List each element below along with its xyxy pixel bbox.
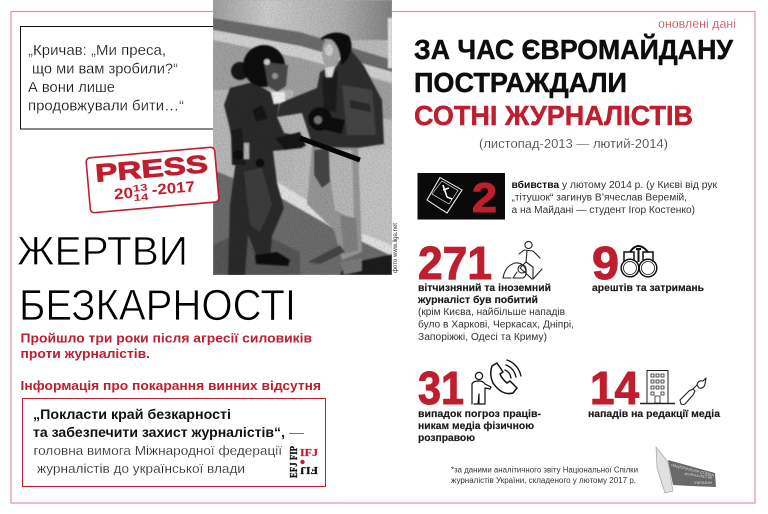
panel: quote box: „Кричав: „Ми преса,	[28, 43, 166, 59]
title	[414, 33, 734, 131]
stat: 31 threats: 31	[418, 362, 464, 414]
text block: three years passed	[20, 332, 321, 393]
main heading: victims of impunity: БЕЗКАРНОСТІ	[19, 281, 296, 330]
stat: 31 threats: никам медіа фізичною	[418, 420, 534, 432]
stat: 14 attacks	[588, 362, 720, 420]
stat: 271 beaten: 271	[418, 237, 492, 289]
stat: 2 killed: а на Майдані — студент Ігор Костенко)	[512, 205, 695, 216]
label: updated data: оновлені дані	[658, 17, 736, 31]
soldier	[224, 82, 303, 275]
panel: IFJ demand: —	[289, 425, 305, 440]
text block: three years passed: Пройшло три роки після агресії силовиків	[20, 332, 312, 346]
main heading: victims of impunity: ЖЕРТВИ	[17, 228, 188, 274]
title: ЗА ЧАС ЄВРОМАЙДАНУ	[414, 33, 734, 65]
stat: 271 beaten: було в Харкові, Черкасах, Дніпрі,	[418, 318, 574, 330]
stat: 271 beaten: Запоріжжі, Одесі та Криму)	[418, 332, 547, 343]
text block: three years passed: Інформація про покарання винних відсутня	[20, 379, 321, 393]
panel: quote box: що ми вам зробили?“	[32, 62, 178, 78]
icon: NUJU pen flag logo	[656, 447, 716, 493]
logo: IFJ	[288, 446, 318, 478]
panel: IFJ demand: головна вимога Міжнародної федерації	[34, 443, 282, 458]
footnote: *за даними аналітичного звіту Національної Спілки	[451, 466, 638, 474]
stat: 2 killed	[418, 173, 718, 221]
panel: IFJ demand: „Покласти край безкарності	[33, 407, 231, 422]
stat: 31 threats	[418, 360, 542, 444]
stat: 9 arrests: арештів та затримань	[592, 282, 705, 294]
stat: 2 killed: 2	[472, 174, 497, 221]
icon: NUJU pen flag logo: ЖУРНАЛІСТІВ	[684, 472, 713, 480]
panel: IFJ demand: та забезпечити захист журналістів“,	[33, 425, 285, 440]
stamp: press 2013-14 to 2017: 13	[132, 182, 148, 195]
icon: NUJU pen flag logo: НАЦІОНАЛЬНА СПІЛКА	[671, 463, 715, 478]
stamp: press 2013-14 to 2017: 14	[133, 192, 150, 204]
photo: riot officer and beaten journalist	[213, 0, 392, 275]
logo: IFJ: IFJ	[300, 448, 318, 459]
icon: photo frame with figure	[427, 178, 462, 213]
logo: IFJ: EFJ FIP	[288, 446, 300, 478]
panel: quote box: А вони лише	[28, 80, 115, 96]
title: СОТНІ ЖУРНАЛІСТІВ	[414, 100, 693, 131]
photo credit: фото www.liga.net	[393, 223, 399, 273]
icon: handcuffs	[621, 246, 657, 277]
icon: building	[640, 370, 675, 404]
stat: 9 arrests	[592, 237, 705, 294]
title: ПОСТРАЖДАЛИ	[414, 67, 627, 98]
panel: IFJ demand: журналістів до української влади	[37, 461, 245, 476]
stat: 271 beaten: (крім Києва, найбільше нападів	[418, 306, 565, 318]
logo: IFJ: FIJ	[300, 464, 318, 475]
footnote: журналістів України, складеного у лютому 2017 р.	[451, 476, 636, 485]
stamp: press 2013-14 to 2017	[86, 147, 219, 213]
journalist pants	[307, 147, 362, 260]
stat: 31 threats: розправою	[418, 432, 475, 444]
text block: three years passed: проти журналістів.	[20, 347, 150, 361]
stamp: press 2013-14 to 2017: -2017	[151, 178, 195, 199]
main heading: victims of impunity	[17, 228, 296, 330]
stat: 14 attacks: нападів на редакції медіа	[588, 408, 720, 420]
panel: IFJ demand	[22, 398, 326, 486]
subtitle: period: (листопад-2013 — лютий-2014)	[479, 136, 668, 151]
panel: quote box: продовжували бити…“	[28, 98, 184, 114]
stat: 2 killed: вбивства у лютому 2014 р. (у Києві від рук	[512, 179, 718, 191]
icon: person with phone	[472, 360, 521, 404]
stat: 14 attacks: 14	[590, 362, 639, 414]
footnote	[451, 466, 638, 485]
stamp: press 2013-14 to 2017: 20	[113, 185, 134, 203]
journalist jacket	[277, 50, 384, 148]
stat: 31 threats: випадок погроз праців-	[418, 408, 542, 420]
stat: 271 beaten	[417, 237, 574, 343]
stat: 271 beaten: журналіст був побитий	[417, 294, 538, 306]
stat: 9 arrests: 9	[592, 237, 619, 289]
stat: 271 beaten: вітчизняний та іноземний	[418, 282, 551, 294]
icon: molotov bottle	[680, 378, 706, 404]
icon: attacker and victim	[503, 241, 542, 279]
stamp: press 2013-14 to 2017: PRESS	[94, 150, 209, 188]
stat: 2 killed: „тітушок“ загинув В’ячеслав Веремій,	[512, 192, 687, 204]
panel: quote box	[20, 26, 220, 129]
icon: NUJU pen flag logo: УКРАЇНИ	[694, 481, 712, 485]
